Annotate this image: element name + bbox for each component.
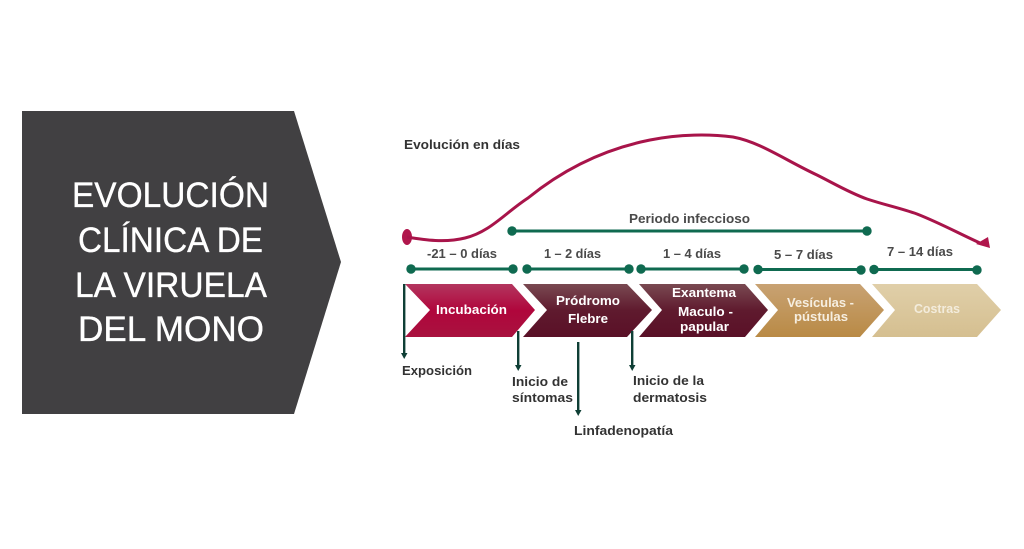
bar: periodo infeccioso [507, 226, 872, 236]
stage: exantema: papular [680, 320, 729, 334]
title: DEL MONO [78, 310, 264, 349]
stage: incubación [405, 284, 535, 337]
day ranges: 7 – 14 días [887, 244, 953, 259]
stage: pródromo [523, 284, 652, 337]
arrows: milestones [401, 284, 636, 416]
stage: exantema: Exantema [672, 286, 737, 300]
stage: incubación: Incubación [436, 303, 507, 317]
stage: vesículas: pústulas [794, 310, 848, 324]
stage: vesículas: Vesículas - [787, 296, 854, 310]
stage: exantema [639, 284, 768, 337]
title: EVOLUCIÓN [72, 176, 269, 215]
milestone labels: Inicio de la [633, 373, 705, 388]
day ranges: 5 – 7 días [774, 247, 833, 262]
title: LA VIRUELA [75, 266, 268, 305]
day ranges: 1 – 2 días [544, 246, 601, 261]
milestone labels: Inicio de [512, 374, 568, 389]
stage: costras [872, 284, 1001, 337]
stage: pródromo: Pródromo [556, 294, 620, 308]
milestone labels: Linfadenopatía [574, 423, 674, 438]
stage: pródromo: Flebre [568, 312, 608, 326]
stage: costras: Costras [914, 302, 960, 316]
milestone labels: dermatosis [633, 390, 707, 405]
day ranges [427, 244, 953, 262]
stage: exantema: Maculo - [678, 305, 733, 319]
milestone labels [402, 363, 707, 438]
duration bars [406, 264, 982, 275]
title [72, 176, 269, 349]
milestone labels: Exposición [402, 363, 472, 378]
title: CLÍNICA DE [78, 221, 263, 260]
day ranges: -21 – 0 días [427, 246, 497, 261]
panel: title arrow [22, 111, 341, 414]
day ranges: 1 – 4 días [663, 246, 721, 261]
stage: vesículas [755, 284, 884, 337]
label: periodo infeccioso: Periodo infeccioso [629, 211, 750, 226]
milestone labels: síntomas [512, 390, 573, 405]
curve: infection evolution [402, 135, 990, 248]
heading: evolución en días: Evolución en días [404, 138, 520, 152]
